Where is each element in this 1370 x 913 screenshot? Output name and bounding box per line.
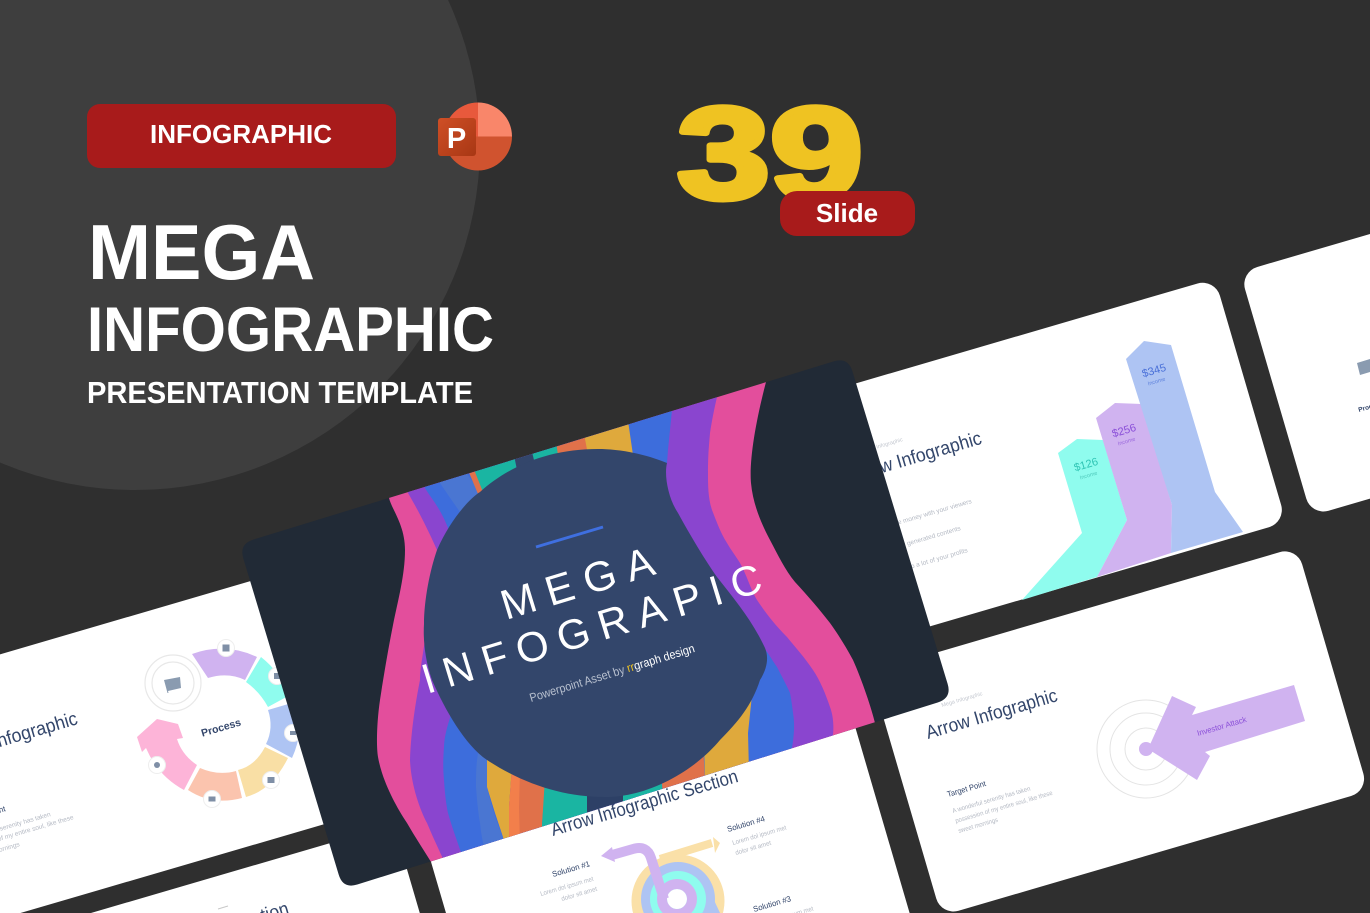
blob: [424, 449, 767, 797]
title: infographic: INFOGRAPHIC: [87, 295, 494, 365]
slide: lower left: [0, 824, 465, 913]
cover base: [242, 360, 949, 886]
solution 4: Lorem dol ipsum met: [732, 824, 787, 847]
value: 345: Income: [1147, 377, 1166, 387]
badge: slide: Slide: [816, 198, 878, 228]
heading: arrow infographic section: Arrow Infographic Section: [549, 766, 741, 841]
slide: process: [0, 556, 406, 913]
ring: cyan segment: [246, 657, 290, 707]
list: Share money with your viewers: [884, 498, 973, 530]
background circle: [0, 0, 480, 490]
slide: target arrow: [870, 547, 1368, 913]
value: 345: $345: [1141, 362, 1168, 380]
arrow: purple bar: [1096, 403, 1172, 577]
subtitle: PRESENTATION TEMPLATE: [87, 375, 473, 410]
value: 256: $256: [1111, 422, 1138, 440]
ring: purple segment: [192, 649, 257, 680]
list: [884, 498, 973, 574]
solution 3: [752, 894, 814, 913]
text: target point: sweet mornings: [958, 817, 1000, 835]
text block: [0, 804, 75, 861]
icon: powerpoint: P: [447, 123, 466, 155]
slide: far right: [1240, 145, 1370, 516]
arrow: yellow: [660, 837, 720, 859]
solution 4: Solution #4: [726, 814, 767, 834]
icon: clipboard: [1357, 359, 1370, 375]
ribbon: purple: [406, 387, 836, 865]
panel: main cover slide: [242, 360, 949, 886]
icon badges: [148, 640, 302, 808]
divider mark: [218, 906, 228, 909]
slide: chart: [782, 278, 1286, 649]
slide: arrow section: [410, 665, 919, 913]
accent line: [536, 527, 603, 547]
value: 126: Income: [1079, 471, 1098, 481]
solution 1: Lorem dol ipsum met: [540, 876, 595, 898]
top stripes: [469, 424, 633, 494]
text: target point: Target Point: [946, 779, 988, 799]
heading: arrow infographic: Arrow Infographic: [924, 685, 1060, 744]
arrow: blue bar: [1126, 341, 1243, 553]
target dot: [1139, 742, 1153, 756]
arrow: investor attack: [1148, 685, 1305, 780]
cover title: infographic: INFOGRAPIC: [416, 554, 767, 703]
icon: powerpoint: [438, 102, 512, 171]
label: investor attack: Investor Attack: [1196, 715, 1248, 738]
value: 256: Income: [1117, 437, 1136, 447]
bottom stripes: [487, 700, 752, 839]
list: User generated contents: [891, 525, 962, 552]
ribbon: light blue: [440, 474, 504, 845]
list: Keep a lot of your profits: [899, 547, 969, 574]
start flag circle: [145, 655, 201, 711]
diagram: concentric arrows: [601, 837, 724, 913]
slide count: 39: 39: [677, 80, 863, 226]
value: 126: $126: [1073, 456, 1100, 474]
target rings: [1097, 700, 1195, 798]
ring: blue segment: [266, 702, 299, 758]
text: target point: [946, 779, 1054, 835]
ribbon: blue: [423, 400, 796, 855]
icon glyphs: [154, 644, 296, 802]
arrow: purple: [601, 847, 692, 913]
solution 4: [726, 814, 787, 857]
caption: Mega Infographic: [941, 691, 984, 709]
ribbon: pink: [377, 372, 880, 870]
text: target point: A wonderful serenity has taken: [952, 785, 1032, 815]
badge: infographic: INFOGRAPHIC: [150, 119, 332, 149]
badge: infographic: [87, 104, 396, 168]
badge: slide: [780, 191, 915, 236]
ring: yellow segment: [238, 747, 288, 797]
solution 1: Solution #1: [551, 859, 592, 879]
cover credit: Powerpoint Asset by rrgraph design: [528, 641, 696, 705]
solution 1: dolor sit amet: [561, 886, 598, 903]
ribbons: [377, 372, 880, 870]
text: target point: possession of my entire soul, like these: [955, 790, 1054, 825]
cover title: mega: MEGA: [495, 537, 660, 629]
heading: flow infographic: Flow Infographic: [854, 428, 984, 485]
title block: [87, 208, 494, 410]
label: process: Process: [200, 717, 243, 740]
icon: flag: [164, 677, 181, 693]
solution 4: dolor sit amet: [735, 840, 772, 857]
caption: Mega Infographic: [861, 437, 904, 455]
title: mega: MEGA: [88, 208, 315, 296]
arrow: pink segment: [137, 719, 197, 790]
solution 1: [540, 859, 598, 903]
ring: orange segment: [188, 768, 242, 801]
arrow: cyan bar: [1022, 439, 1127, 600]
